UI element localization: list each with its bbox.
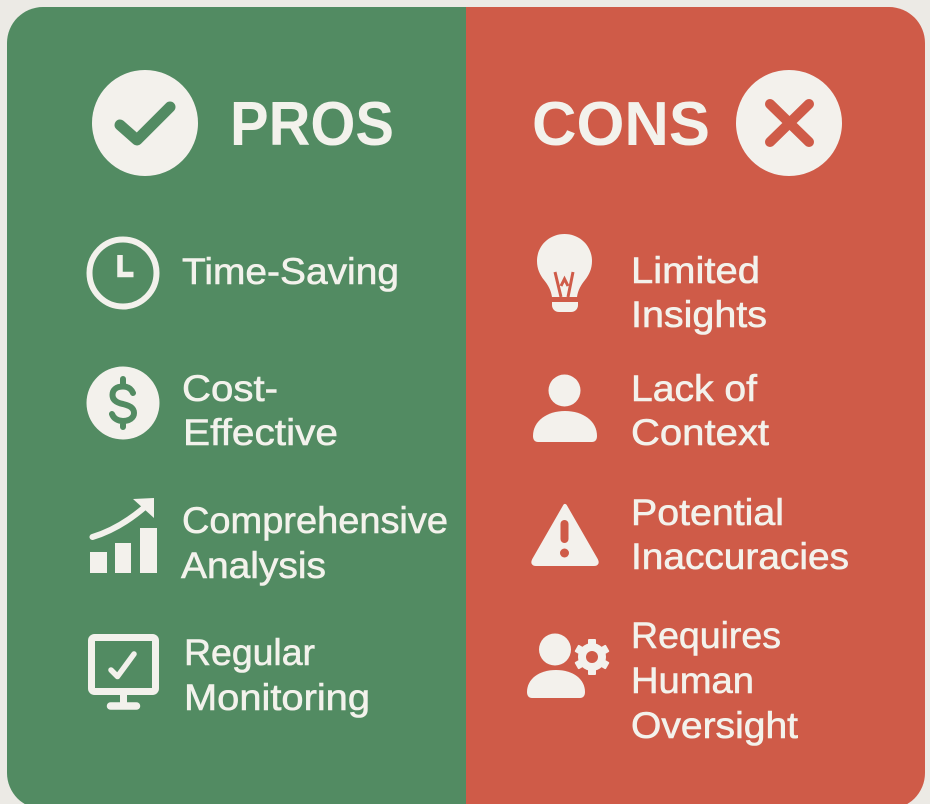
icon: monitor with check (92, 638, 156, 706)
label: limited insights: Limited (631, 249, 760, 291)
icon: dollar coin (86, 366, 160, 440)
label: requires human oversight (631, 614, 799, 746)
heading: pros: PROS (230, 90, 394, 159)
label: cost-effective: Effective (183, 411, 338, 453)
label: regular monitoring: Regular (184, 631, 315, 673)
icon: x mark badge (736, 70, 842, 176)
label: requires human oversight: Requires (631, 614, 781, 656)
label: requires human oversight: Oversight (631, 704, 799, 746)
label: lack of context: Context (631, 411, 770, 453)
icon: rising bar chart (90, 498, 157, 573)
label: potential inaccuracies: Inaccuracies (631, 535, 849, 577)
icon: person with gear (527, 634, 610, 698)
heading: cons: CONS (532, 90, 710, 159)
panel: cons (466, 7, 925, 804)
icon: clock (90, 240, 156, 306)
label: regular monitoring: Monitoring (184, 676, 370, 718)
label: limited insights: Insights (631, 293, 767, 335)
label: lack of context: Lack of (631, 367, 758, 409)
icon: light bulb (537, 234, 592, 312)
icon: warning triangle (533, 506, 597, 564)
icon: check mark badge (92, 70, 198, 176)
label: potential inaccuracies (631, 491, 849, 577)
label: potential inaccuracies: Potential (631, 491, 784, 533)
icon: person (533, 374, 597, 442)
label: lack of context (631, 367, 770, 453)
label: cost-effective: Cost- (182, 367, 278, 409)
label: time-saving: Time-Saving (182, 250, 399, 292)
panel: pros (7, 7, 466, 804)
label: comprehensive analysis: Comprehensive (182, 499, 448, 541)
label: comprehensive analysis: Analysis (181, 544, 326, 586)
label: cost-effective (182, 367, 338, 453)
label: limited insights (631, 249, 767, 335)
label: regular monitoring (184, 631, 370, 718)
label: requires human oversight: Human (631, 659, 754, 701)
label: comprehensive analysis (181, 499, 448, 586)
